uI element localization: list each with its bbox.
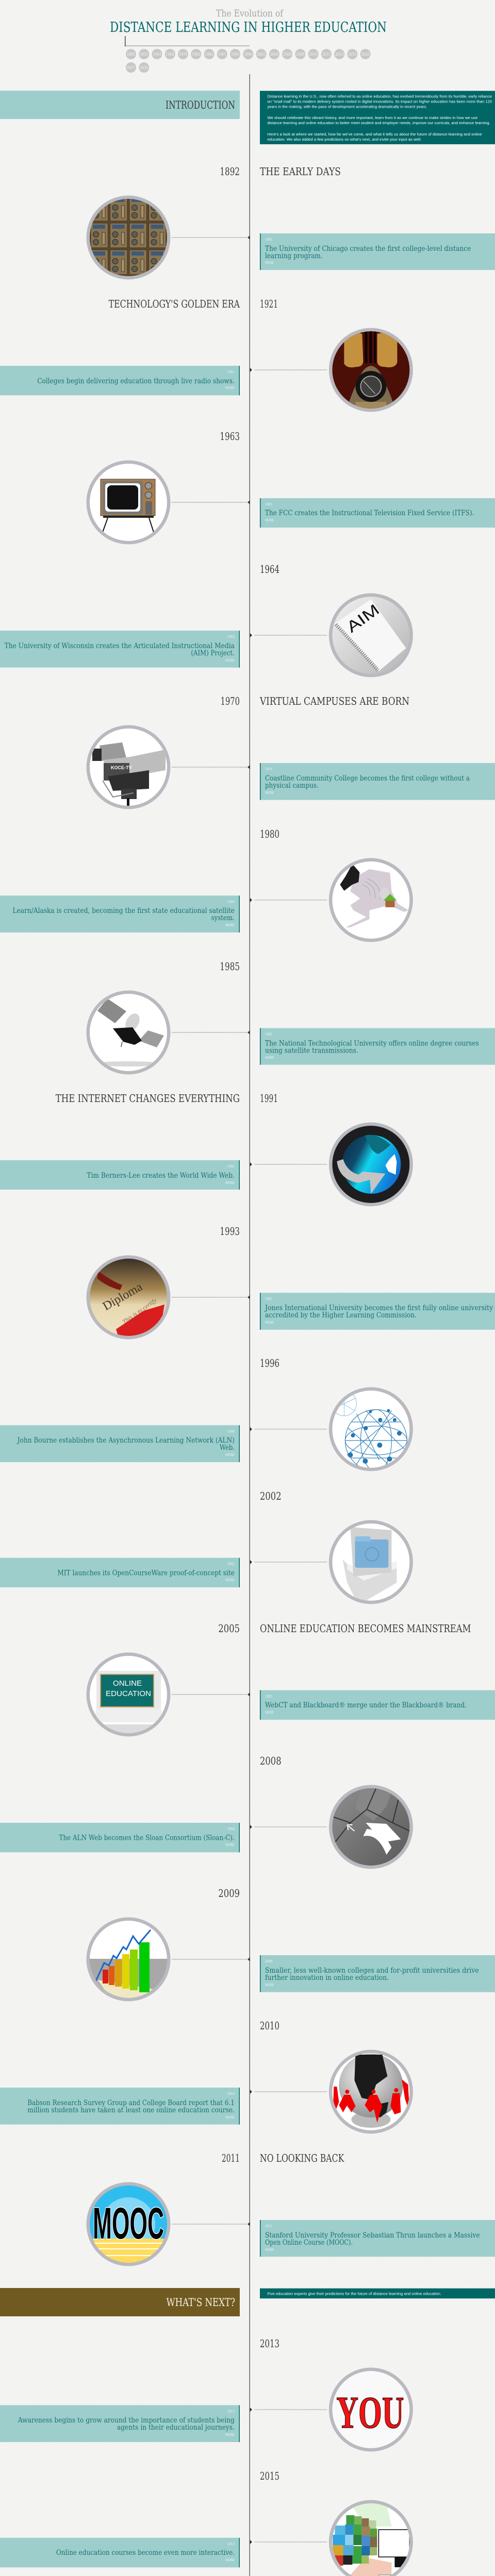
event card: MORE — [265, 791, 274, 795]
milestone: 2011: NO LOOKING BACK — [260, 2152, 344, 2164]
milestone: 2008: 2008 — [260, 1755, 282, 1767]
year navigation with dotted lead-in: 2015 — [348, 52, 356, 57]
event card: further innovation in online education. — [265, 1974, 389, 1982]
milestone: 1991: 1991 — [260, 1092, 278, 1105]
event card: The University of Wisconsin creates the Articulated Instructional Media — [5, 642, 235, 650]
icon: keyboard key with graduation cap — [329, 1785, 413, 1869]
event card: MIT launches its OpenCourseWare proof-of-concept site — [57, 1569, 235, 1578]
milestone: 1964: 1964 — [260, 563, 279, 575]
event card: 1996 — [227, 1430, 235, 1433]
subtitle: The Evolution of — [216, 8, 284, 19]
event card — [0, 2538, 240, 2567]
icon: Alaska satellite map — [329, 858, 413, 942]
event card — [260, 1955, 495, 1992]
milestone: 1985 — [87, 960, 495, 1075]
event card — [260, 1028, 495, 1065]
year navigation with dotted lead-in: 1993 — [231, 52, 239, 57]
milestone: 1993 — [87, 1225, 495, 1340]
event card: MORE — [225, 2558, 235, 2562]
icon: laptop chalkboard: ONLINE — [113, 1679, 142, 1688]
event card — [260, 2220, 495, 2257]
year navigation with dotted lead-in: 1980 — [192, 52, 200, 57]
year navigation with dotted lead-in: 2011 — [322, 52, 331, 57]
event card: physical campus. — [265, 782, 319, 790]
event card: 1970 — [265, 768, 272, 771]
milestone: 2013: 2013 — [260, 2337, 279, 2350]
icon: television — [87, 461, 170, 544]
year navigation with dotted lead-in: 1963 — [153, 52, 161, 57]
event card: Awareness begins to grow around the importance of students being — [18, 2416, 235, 2425]
milestone: 1921 — [0, 298, 413, 412]
year navigation with dotted lead-in: 2005 — [270, 52, 278, 57]
event card: agents in their educational journeys. — [117, 2424, 235, 2432]
event card: accredited by the Higher Learning Commission. — [265, 1311, 417, 1319]
event card: John Bourne establishes the Asynchronous Learning Network (ALN) — [16, 1436, 235, 1445]
year navigation with dotted lead-in: 1996 — [244, 52, 252, 57]
icon: TV studio camera — [87, 725, 170, 809]
milestone: 2009 — [87, 1887, 495, 2001]
milestone: 2010 — [0, 2020, 413, 2134]
event card: 1892 — [265, 238, 272, 242]
introduction text panel: distance learning and online education to better meet student and employer needs, improve our curricula, and enhance learning. — [267, 121, 490, 125]
milestone: 1980: 1980 — [260, 828, 279, 840]
event card: 2011 — [265, 2225, 272, 2228]
year navigation with dotted lead-in: 1892 — [127, 52, 135, 57]
event card: learning program. — [265, 252, 323, 260]
header: title block — [110, 8, 387, 36]
introduction band — [0, 91, 240, 119]
milestone: 2013 — [0, 2337, 413, 2451]
event card: Learn/Alaska is created, becoming the first state educational satellite — [12, 907, 235, 915]
milestone: 1970 — [87, 695, 495, 809]
year navigation with dotted lead-in: 2035 — [140, 65, 148, 70]
event card — [0, 2088, 240, 2125]
event card: MORE — [225, 659, 235, 663]
year navigation with dotted lead-in: 1970 — [179, 52, 187, 57]
event card: 2002 — [227, 1563, 235, 1566]
year navigation with dotted lead-in: 1921 — [140, 52, 148, 57]
event card — [0, 366, 240, 395]
event card — [0, 1823, 240, 1852]
event card: (AIM) Project. — [191, 649, 235, 657]
year navigation with dotted lead-in: 1985 — [205, 52, 213, 57]
milestone: 2015: 2015 — [260, 2470, 279, 2482]
milestone: 1991 — [0, 1092, 413, 1207]
icon: YOU lettering — [329, 2368, 413, 2451]
event card: million students have taken at least one online education course. — [27, 2106, 235, 2114]
introduction text panel: on "snail mail" to its modern delivery system rooted in digital innovations. Its impact on higher education has been more than 120 — [267, 99, 492, 104]
event card: MORE — [265, 2248, 274, 2252]
event card — [260, 763, 495, 800]
icon: network sphere — [329, 1387, 413, 1471]
event card: MORE — [225, 1843, 235, 1847]
event card: MORE — [225, 924, 235, 927]
event card: 1985 — [265, 1032, 272, 1037]
milestone: 1892: 1892 — [220, 165, 240, 178]
icon: laptop chalkboard: EDUCATION — [106, 1689, 151, 1698]
introduction text panel: years in the making, with the pace of development accelerating dramatically in recent years. — [267, 104, 427, 109]
year navigation with dotted lead-in: 2008 — [283, 52, 291, 57]
icon: diploma: Diploma — [101, 1280, 145, 1313]
event card — [0, 2405, 240, 2442]
icon: growth bar chart — [87, 1918, 170, 2001]
year navigation with dotted lead-in: 2002 — [257, 52, 266, 57]
icon: laptop chalkboard — [87, 1653, 170, 1736]
introduction band: INTRODUCTION — [166, 99, 235, 112]
event card: MORE — [225, 2433, 235, 2437]
event card — [0, 895, 240, 933]
icon: globe with red figures — [329, 2049, 413, 2134]
icon: folder on books — [329, 1520, 413, 1604]
what's next note — [260, 2289, 495, 2298]
icon: diploma — [87, 1255, 170, 1340]
event card: MORE — [225, 1453, 235, 1457]
event card: 1993 — [265, 1297, 272, 1301]
milestone: 1996 — [0, 1357, 413, 1471]
event card: 1963 — [265, 503, 272, 506]
event card — [0, 1558, 240, 1587]
introduction text panel — [260, 91, 495, 144]
year navigation with dotted lead-in: 2027 — [127, 65, 135, 70]
milestone: 2010: 2010 — [260, 2020, 279, 2032]
milestone: 2011: 2011 — [222, 2152, 240, 2164]
icon: media collage and screen — [329, 2500, 413, 2576]
icon: MOOC badge: MOOC — [93, 2199, 164, 2248]
introduction text panel: Distance learning in the U.S., now often referred to as online education, has evolved tremendously from its humble, early reliance — [267, 94, 492, 99]
milestone: 1963: 1963 — [220, 430, 240, 443]
event card: 2010 — [227, 2092, 235, 2096]
icon: AIM notebook — [329, 594, 413, 677]
event card: system. — [211, 914, 235, 922]
event card — [0, 1425, 240, 1462]
event card — [0, 1160, 240, 1190]
milestone: 1980 — [0, 828, 413, 942]
milestone: 2015 — [0, 2470, 413, 2576]
milestone: 1985: 1985 — [220, 960, 240, 973]
milestone: 1993: 1993 — [220, 1225, 240, 1238]
event card: Colleges begin delivering education through live radio shows. — [37, 377, 235, 385]
event card: 2013 — [227, 2410, 235, 2413]
event card: MORE — [225, 1579, 235, 1582]
introduction text panel: Here's a look at where we started, how far we've come, and what it tells us about the future of distance learning and online — [267, 132, 482, 137]
event card — [260, 233, 495, 270]
event card: 1991 — [227, 1165, 235, 1168]
year navigation with dotted lead-in: 2020 — [361, 52, 370, 57]
milestone: 1921: TECHNOLOGY'S GOLDEN ERA — [109, 298, 240, 310]
icon: AIM notebook: AIM — [343, 601, 383, 636]
milestone: 1996: 1996 — [260, 1357, 279, 1369]
main title: DISTANCE LEARNING IN HIGHER EDUCATION — [110, 19, 387, 36]
year navigation with dotted lead-in: 2013 — [335, 52, 343, 57]
event card: Tim Berners-Lee creates the World Wide Web. — [87, 1172, 235, 1180]
section band: what's next — [0, 2288, 240, 2316]
event card: Web. — [220, 1444, 235, 1452]
year navigation with dotted lead-in: 2010 — [309, 52, 318, 57]
milestone: 1970: 1970 — [221, 695, 240, 707]
event card: MORE — [265, 519, 274, 522]
event card — [260, 1293, 495, 1330]
year navigation with dotted lead-in: 2009 — [296, 52, 304, 57]
milestone: 1921: 1921 — [260, 298, 278, 310]
event card: 2008 — [227, 1827, 235, 1831]
event card: MORE — [225, 386, 235, 390]
event card: 2015 — [227, 2543, 235, 2546]
event card: MORE — [265, 1056, 274, 1060]
event card: MORE — [265, 1984, 274, 1987]
milestone: 1892 — [87, 165, 495, 279]
icon: YOU lettering: YOU — [336, 2388, 404, 2438]
event card: MORE — [265, 1321, 274, 1325]
event card: 1921 — [227, 370, 235, 374]
event card: 1964 — [227, 635, 235, 639]
icon: diploma: This is to certify — [121, 1296, 158, 1325]
event card: 1980 — [227, 900, 235, 904]
event card: MORE — [225, 2116, 235, 2120]
icon: globe with cursor — [329, 1122, 413, 1207]
event card: Open Online Course (MOOC). — [265, 2239, 353, 2247]
year navigation with dotted lead-in: 1991 — [218, 52, 226, 57]
event card: The ALN Web becomes the Sloan Consortium (Sloan-C). — [59, 1834, 235, 1842]
introduction text panel: education. We also added a few predictions on what's next, and invite your input as well. — [267, 137, 421, 142]
milestone: 2002 — [0, 1490, 413, 1604]
introduction text panel: We should celebrate this vibrant history, and more important, learn from it as we continue to make strides in how we use — [267, 115, 477, 120]
event card: using satellite transmissions. — [265, 1047, 358, 1055]
icon: TV studio camera: KOCE-TV — [111, 765, 132, 770]
milestone: 2002: 2002 — [260, 1490, 282, 1502]
icon: satellite — [87, 990, 170, 1075]
milestone: 1892: THE EARLY DAYS — [260, 165, 341, 178]
event card — [0, 631, 240, 668]
icon: MOOC badge — [87, 2182, 170, 2266]
milestone: 2009: 2009 — [218, 1887, 240, 1900]
event card: MORE — [265, 261, 274, 265]
icon: post office boxes — [87, 195, 170, 279]
event card: The University of Chicago creates the first college-level distance — [265, 245, 471, 253]
milestone: 1970: VIRTUAL CAMPUSES ARE BORN — [259, 695, 409, 707]
event card: WebCT and Blackboard® merge under the Blackboard® brand. — [265, 1701, 467, 1709]
event card: MORE — [265, 1711, 274, 1715]
year navigation with dotted lead-in: 1964 — [166, 52, 174, 57]
event card: 2005 — [265, 1695, 272, 1699]
icon: vintage radio — [329, 328, 413, 412]
milestone: 2011 — [87, 2152, 495, 2266]
what's next note: Five education experts give their predictions for the future of distance learning and online education. — [267, 2292, 441, 2296]
event card: MORE — [225, 1181, 235, 1185]
event card: Online education courses become even more interactive. — [56, 2549, 235, 2557]
section band: what's next: WHAT'S NEXT? — [167, 2296, 235, 2309]
milestone: 1964 — [0, 563, 413, 677]
milestone: 1991: THE INTERNET CHANGES EVERYTHING — [56, 1092, 240, 1105]
event card: 2009 — [265, 1960, 272, 1963]
milestone: 2008 — [0, 1755, 413, 1869]
event card — [260, 498, 495, 528]
milestone: 1963 — [87, 430, 495, 544]
milestone: 2005: 2005 — [218, 1622, 240, 1635]
event card: Babson Research Survey Group and College Board report that 6.1 — [27, 2099, 235, 2107]
event card — [260, 1690, 495, 1720]
milestone: 2005 — [87, 1622, 495, 1736]
year navigation with dotted lead-in — [125, 36, 371, 73]
